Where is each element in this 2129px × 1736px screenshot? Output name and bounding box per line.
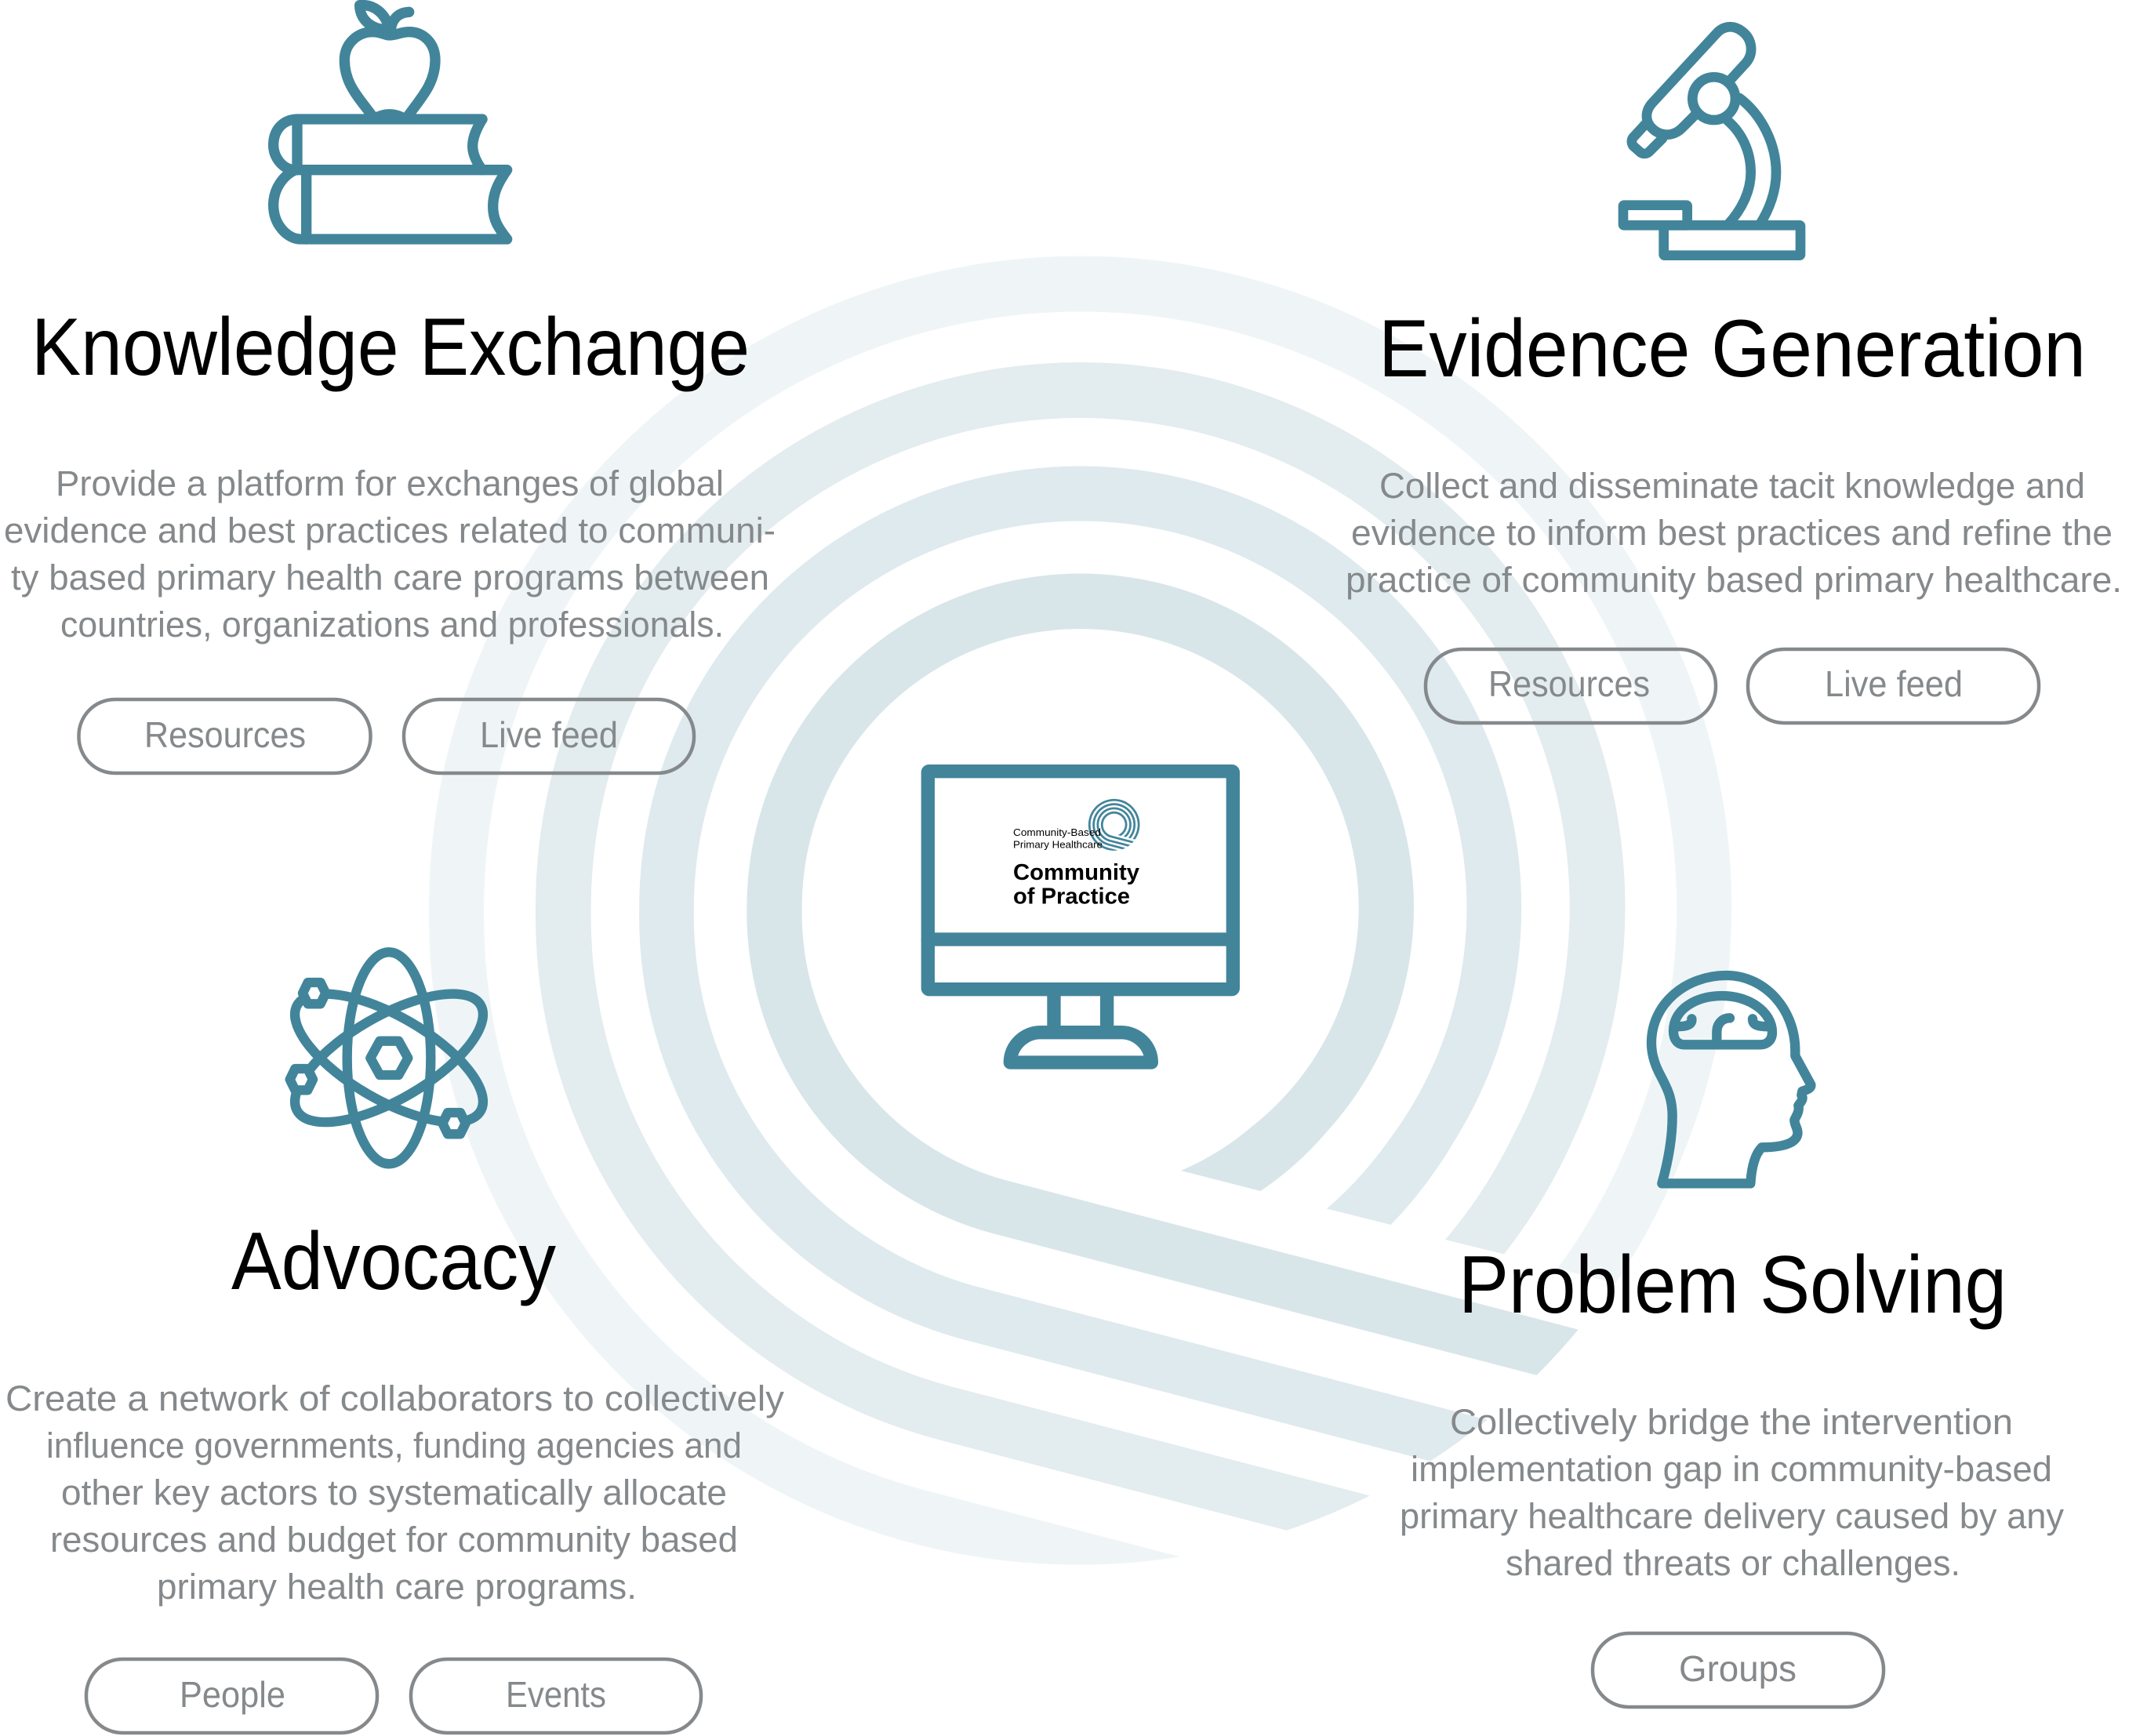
icon: microscope [1623,27,1800,256]
heading: Knowledge Exchange [31,302,750,393]
heading: Advocacy [231,1216,556,1307]
button: resources [78,699,370,773]
description: evidence to inform best practices and refine the [1351,513,2113,553]
description [1400,1402,2064,1583]
ring 3 [536,362,1625,1531]
description: primary healthcare delivery caused by any [1400,1496,2064,1536]
button: resources: Resources [1488,663,1650,704]
ring 1 innermost [747,574,1579,1375]
description: evidence and best practices related to communi- [4,510,776,550]
button: resources: Resources [144,714,306,755]
icon: head with brain [1651,975,1811,1183]
button: live feed: Live feed [480,714,618,755]
description: resources and budget for community based [50,1520,738,1560]
panel: problem solving [1400,975,2064,1707]
description: practice of community based primary healthcare. [1346,560,2122,600]
panel: central monitor [928,772,1233,1062]
heading: Evidence Generation [1379,303,2086,394]
heading: Problem Solving [1459,1240,2007,1331]
panel: evidence generation [1346,27,2122,723]
button: people: People [180,1674,285,1715]
description [5,1378,785,1607]
button: events [411,1659,701,1733]
button: groups: Groups [1679,1648,1797,1689]
button: live feed: Live feed [1825,663,1963,704]
description [4,463,776,645]
button: people [86,1659,377,1733]
description: implementation gap in community-based [1411,1449,2052,1489]
ring 4 outermost [429,256,1731,1565]
logo text: Community-Based [1013,826,1101,838]
logo text: Community [1013,860,1139,885]
description: Collect and disseminate tacit knowledge and [1379,466,2085,506]
description: countries, organizations and professionals. [60,605,724,645]
description: Create a network of collaborators to collectively [5,1378,785,1418]
icon: apple on books [274,5,507,239]
icon: atom [276,952,502,1164]
description: Collectively bridge the intervention [1450,1402,2013,1442]
description: influence governments, funding agencies and [46,1425,742,1465]
background: concentric ring logo [429,256,1731,1565]
panel: knowledge exchange [4,5,776,773]
button: resources [1426,649,1716,723]
description: ty based primary health care programs between [11,557,769,597]
description: shared threats or challenges. [1506,1543,1960,1583]
panel: advocacy [5,952,785,1733]
logo text: Primary Healthcare [1013,839,1103,850]
logo text [1013,826,1139,910]
description: Provide a platform for exchanges of global [56,463,724,503]
description: primary health care programs. [157,1567,637,1607]
logo mark [1088,799,1140,851]
button: live feed [1748,649,2039,723]
icon: monitor [928,772,1233,1062]
description: other key actors to systematically allocate [61,1473,727,1513]
logo text: of Practice [1013,884,1130,910]
button: live feed [404,699,694,773]
ring 2 [639,466,1521,1461]
description [1346,466,2122,600]
button: groups [1593,1633,1884,1707]
button: events: Events [506,1674,606,1715]
